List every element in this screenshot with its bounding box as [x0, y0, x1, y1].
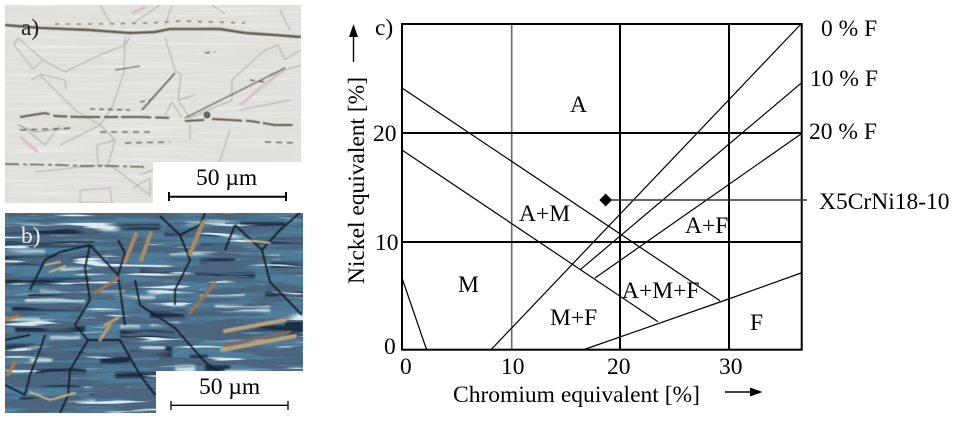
phase labels: A [570, 92, 587, 118]
x tick labels [400, 354, 742, 380]
ferrite labels [809, 16, 950, 215]
scale bar box a: 50 µm [196, 165, 257, 191]
scale bar box b [156, 371, 306, 417]
label a: a) [21, 15, 39, 41]
schaeffler diagram [402, 24, 802, 350]
x axis arrow [725, 388, 762, 396]
x tick labels: 10 [501, 354, 524, 380]
phase labels: A+M [519, 201, 570, 227]
scale bar box a [153, 162, 303, 206]
phase labels: A+F [685, 213, 728, 239]
phase boundary lines [402, 24, 801, 350]
label b: b) [21, 223, 41, 249]
phase labels: A+M+F [622, 278, 699, 304]
phase labels [458, 92, 763, 336]
label c: c) [375, 15, 393, 41]
y axis arrow [349, 24, 358, 62]
panel a: light micrograph [5, 5, 301, 203]
x axis title: Chromium equivalent [%] [453, 382, 700, 408]
y tick labels: 0 [384, 334, 396, 360]
ferrite labels: X5CrNi18-10 [819, 189, 950, 215]
y tick labels [373, 121, 398, 360]
x tick labels: 30 [719, 354, 742, 380]
panel b: polarised micrograph [5, 210, 303, 413]
grid lines [402, 24, 802, 350]
y tick labels: 20 [373, 121, 396, 147]
scale bar box b: 50 µm [199, 374, 260, 400]
phase labels: F [750, 310, 763, 336]
data point X5CrNi18-10 [599, 194, 807, 206]
phase labels: M+F [550, 305, 597, 331]
phase labels: M [458, 272, 479, 298]
y axis title: Nickel equivalent [%] [344, 77, 370, 284]
x tick labels: 20 [607, 354, 630, 380]
plot frame [402, 24, 802, 350]
x tick labels: 0 [400, 354, 412, 380]
y tick labels: 10 [375, 230, 398, 256]
ferrite labels: 20 % F [809, 119, 877, 145]
ferrite labels: 0 % F [821, 16, 877, 42]
ferrite labels: 10 % F [810, 66, 878, 92]
